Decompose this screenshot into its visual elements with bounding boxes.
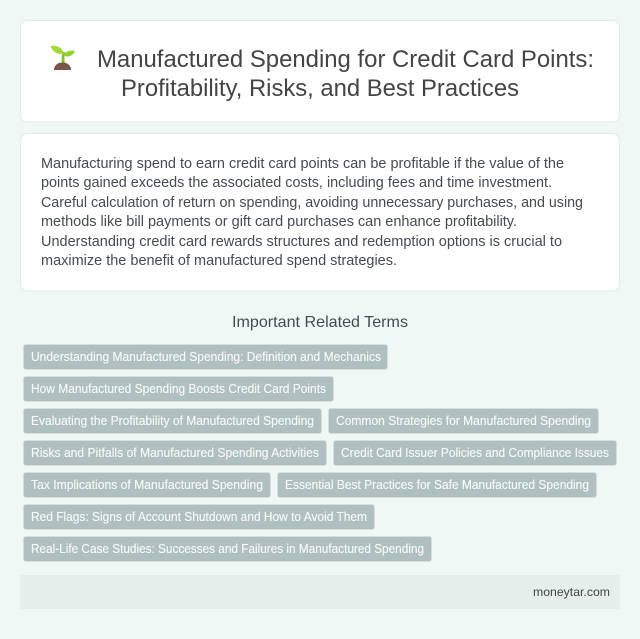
icon: sprout [50, 46, 75, 70]
title: Manufactured Spending for Credit Card Points: [97, 46, 594, 73]
chip: understanding [24, 344, 388, 370]
chip: case studies [24, 536, 432, 562]
chip: understanding: Understanding Manufactured Spending: Definition and Mechanics [31, 350, 381, 364]
text block: description: points gained exceeds the associated costs, including fees and time investment. [41, 175, 552, 191]
text block: description: Manufacturing spend to earn credit card points can be profitable if the value of the [41, 156, 564, 172]
chip: tax [24, 472, 270, 498]
chip: issuer policies: Credit Card Issuer Policies and Compliance Issues [341, 446, 609, 460]
chip: strategies [328, 408, 598, 434]
chip: best practices [278, 472, 596, 498]
text block: description: maximize the benefit of manufactured spend strategies. [41, 253, 397, 269]
text block: description: methods like bill payments or gift card purchases can enhance profitability. [41, 214, 517, 230]
chip: case studies: Real-Life Case Studies: Successes and Failures in Manufactured Spending [31, 542, 424, 556]
footer [20, 575, 620, 609]
panel: description card [20, 134, 620, 291]
chip: profitability [24, 408, 322, 434]
chip: risks [24, 440, 326, 466]
chip: tax: Tax Implications of Manufactured Spending [31, 478, 263, 492]
title: Profitability, Risks, and Best Practices [121, 75, 519, 102]
text block: description: Understanding credit card rewards structures and redemption options is crucial to [41, 234, 562, 250]
chip: risks: Risks and Pitfalls of Manufactured Spending Activities [31, 446, 319, 460]
text block: description [41, 156, 583, 269]
heading: important related terms: Important Related Terms [232, 314, 408, 331]
chip: red flags: Red Flags: Signs of Account Shutdown and How to Avoid Them [31, 510, 367, 524]
panel: related terms [24, 344, 616, 562]
chip: strategies: Common Strategies for Manufactured Spending [336, 414, 591, 428]
chip: red flags [24, 504, 374, 530]
footer source: moneytar.com [533, 585, 610, 599]
chip: boosts points [24, 376, 334, 402]
chip: best practices: Essential Best Practices for Safe Manufactured Spending [285, 478, 589, 492]
chip: boosts points: How Manufactured Spending Boosts Credit Card Points [31, 382, 326, 396]
chip: issuer policies [334, 440, 616, 466]
title [97, 46, 594, 102]
text block: description: Careful calculation of return on spending, avoiding unnecessary purchases, and using [41, 195, 583, 211]
panel: title card [20, 20, 620, 122]
chip: profitability: Evaluating the Profitability of Manufactured Spending [31, 414, 314, 428]
